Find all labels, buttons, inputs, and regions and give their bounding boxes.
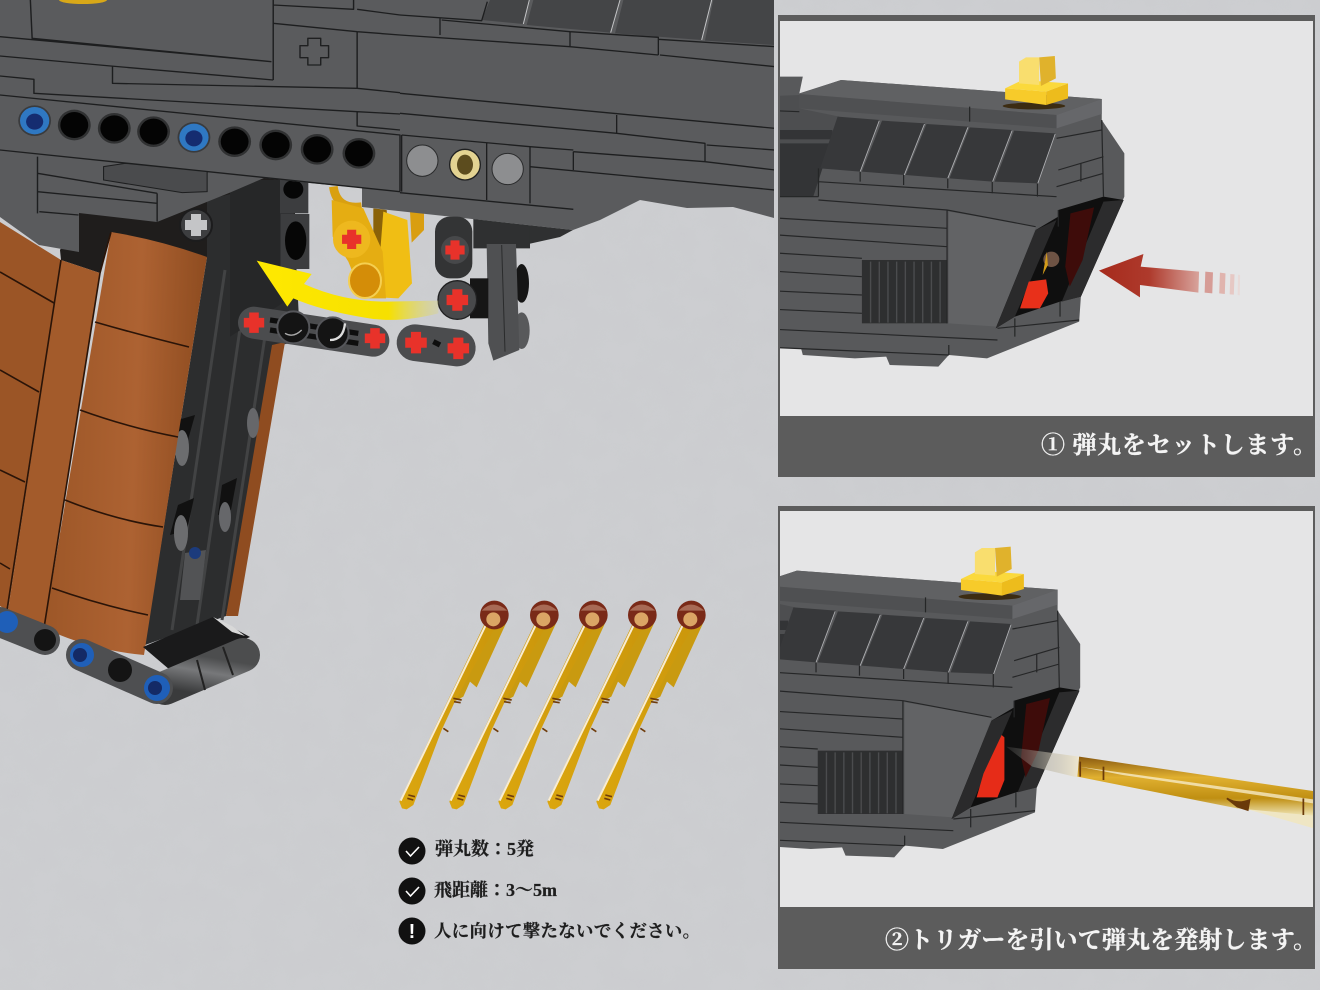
right column and links <box>435 217 530 361</box>
arrow: red insert direction <box>1099 254 1240 297</box>
bullet 1 <box>399 601 509 809</box>
arrow: yellow trigger pull direction <box>257 261 438 320</box>
gun body <box>0 0 774 252</box>
bullet 5 <box>596 601 706 809</box>
five gold bullets <box>399 601 706 809</box>
fired bullet with motion trail <box>1006 747 1317 829</box>
brick seams and tiles: right of body <box>400 0 775 209</box>
panel: step 2 fire bullet <box>778 506 1315 969</box>
icon: yellow front sight <box>959 547 1024 600</box>
icon: yellow front sight <box>1003 56 1068 109</box>
brick gun muzzle before loading <box>754 56 1124 367</box>
icon: warning: ! <box>409 921 415 943</box>
icon: check 2 <box>398 878 426 904</box>
warning text: 人に向けて撃たないでください。 <box>434 921 700 941</box>
gold part at top edge <box>59 0 107 4</box>
panel: step 1 load bullet <box>754 15 1317 477</box>
bullet 2 <box>449 601 559 809</box>
bottom links of magazine <box>0 611 250 701</box>
magazine grip frame <box>145 178 300 645</box>
row of pin holes <box>18 105 375 169</box>
trigger mechanism rear parts <box>230 179 424 337</box>
dark shadow under body <box>60 175 295 273</box>
spec: bullet count: 弾丸数：5発 <box>435 839 534 859</box>
icon: warning <box>398 918 426 944</box>
bullet 3 <box>498 601 608 809</box>
magazine brown plates <box>0 222 207 655</box>
icon: check 1 <box>398 838 426 864</box>
caption: step 1: ① 弾丸をセットします。 <box>1041 432 1317 459</box>
grip pin with grey cross <box>180 209 212 241</box>
frame column with holes <box>230 179 309 337</box>
brick gun muzzle after firing <box>780 546 1313 858</box>
caption: step 2: ②トリガーを引いて弾丸を発射します。 <box>885 927 1317 954</box>
spec list <box>398 838 700 944</box>
dark part under body <box>473 219 573 244</box>
spec: range: 飛距離：3～5m <box>434 880 557 900</box>
gold trigger <box>332 187 424 298</box>
bullet 4 <box>547 601 657 809</box>
brick seams: left of body <box>0 0 400 222</box>
lower link beam <box>244 311 469 359</box>
trigger mechanism front parts <box>244 217 530 361</box>
main gun illustration: grip, trigger and magazine <box>0 0 775 701</box>
